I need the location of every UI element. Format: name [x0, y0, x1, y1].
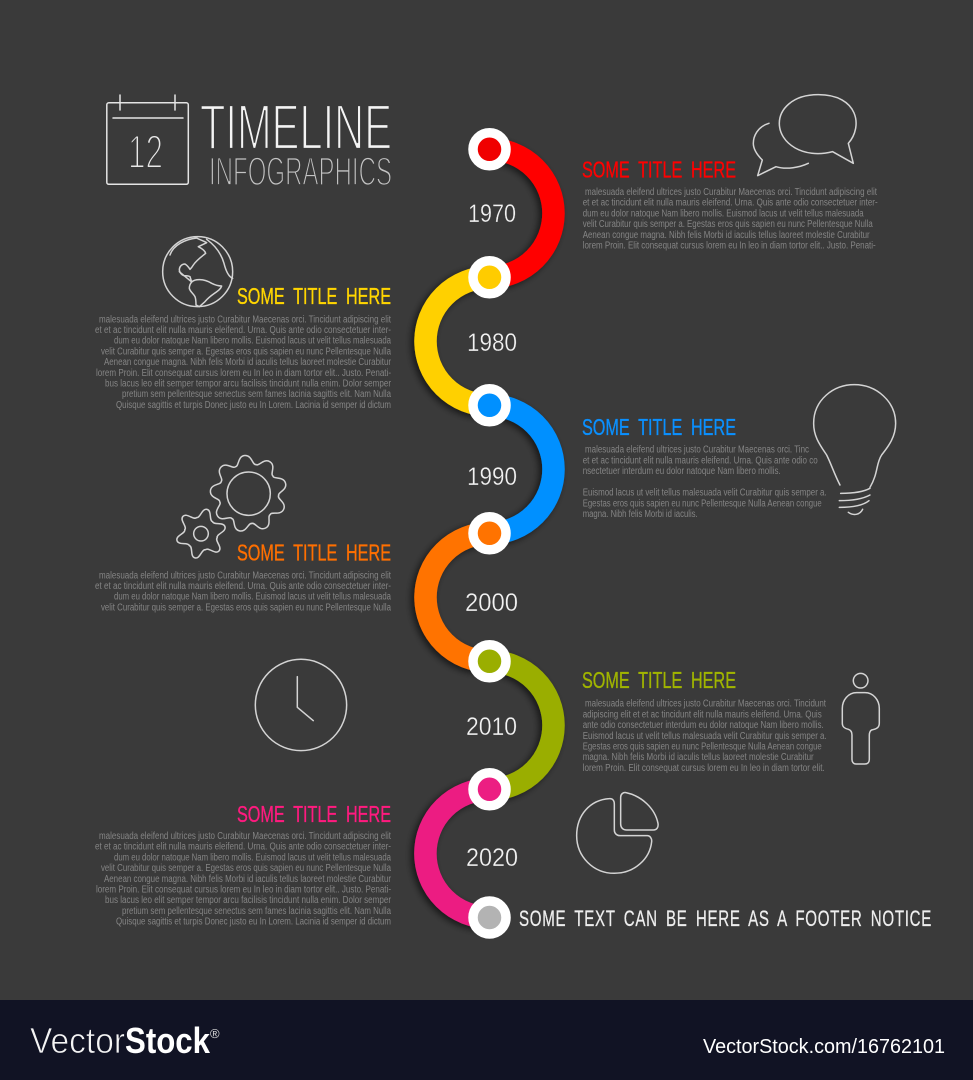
text block: blue: nsectetuer interdum eu dolor natoque Nam libero mollis. [583, 466, 781, 477]
icon: light bulb [814, 385, 896, 514]
text block: yellow: dum eu dolor natoque Nam libero mollis. Euismod lacus ut velit tellus malesuada [114, 336, 391, 347]
text block: yellow: bus lacus leo elit semper tempor arcu facilisis tincidunt nulla enim. Dolor semper [105, 378, 392, 390]
text block: pink: velit Curabitur quis semper a. Egestas eros quis sapien eu nunc Pellentesque Nulla [101, 863, 391, 874]
text block: yellow: et et ac tincidunt elit nulla mauris eleifend. Urna. Quis ante odio consectetuer inter- [95, 325, 391, 336]
year labels: 1990 [467, 463, 517, 491]
heading: yellow title: SOME TITLE HERE [237, 283, 391, 309]
text block: green: Euismod lacus ut velit tellus malesuada velit Curabitur quis semper a. [583, 731, 827, 742]
text block: orange: et et ac tincidunt elit nulla mauris eleifend. Urna. Quis ante odio consectetuer inter- [95, 581, 391, 592]
text block: green: lorem Proin. Elit consequat cursus lorem eu In leo in diam tortor elit. [583, 763, 825, 774]
text block: pink: Aenean congue magna. Nibh felis Morbi id iaculis tellus laoreet molestie Curabitur [104, 874, 392, 885]
text block: red [583, 187, 878, 252]
text block: green [583, 699, 827, 774]
heading: blue title: SOME TITLE HERE [582, 414, 736, 440]
text block: green: malesuada eleifend ultrices justo Curabitur Maecenas orci. Tincidunt [585, 699, 826, 710]
icon: gears [175, 454, 288, 560]
icon: globe [163, 237, 233, 307]
text block: yellow: Quisque sagittis et turpis Donec justo eu In Lorem. Lacinia id semper id dictum [116, 400, 391, 411]
text block: blue [583, 445, 827, 520]
text block: red: velit Curabitur quis semper a. Egestas eros quis sapien eu nunc Pellentesque Nulla [583, 219, 873, 230]
text block: red: lorem Proin. Elit consequat cursus lorem eu In leo in diam tortor elit.. Justo. Penati- [583, 240, 876, 252]
text block: pink: et et ac tincidunt elit nulla mauris eleifend. Urna. Quis ante odio consectetuer inter- [95, 842, 391, 853]
text block: pink [95, 831, 392, 928]
text block: yellow: malesuada eleifend ultrices justo Curabitur Maecenas orci. Tincidunt adipiscing elit [99, 314, 391, 325]
text block: blue: Euismod lacus ut velit tellus malesuada velit Curabitur quis semper a. [583, 488, 827, 499]
year labels: 1970 [468, 200, 516, 228]
text block: red: malesuada eleifend ultrices justo Curabitur Maecenas orci. Tincidunt adipiscing elit [585, 187, 877, 198]
text block: orange: dum eu dolor natoque Nam libero mollis. Euismod lacus ut velit tellus malesuada [114, 592, 391, 603]
panel: 2000 text [95, 540, 391, 613]
text block: yellow [95, 314, 392, 411]
text block: red: Aenean congue magna. Nibh felis Morbi id iaculis tellus laoreet molestie Curabitur [583, 230, 870, 241]
text block: pink: malesuada eleifend ultrices justo Curabitur Maecenas orci. Tincidunt adipiscing elit [99, 831, 391, 842]
year labels [465, 200, 518, 872]
icon: calendar [107, 95, 188, 184]
panel: 2010 text [582, 667, 827, 774]
watermark bar: VectorStock.com/16762101 [703, 1036, 945, 1058]
icon: pie chart [577, 793, 658, 873]
heading: red title: SOME TITLE HERE [582, 156, 736, 182]
text block: green: ante odio consectetuer interdum eu dolor natoque Nam libero mollis. [583, 720, 824, 731]
panel: 1970 text [582, 156, 878, 252]
text block: red: et et ac tincidunt elit nulla mauris eleifend. Urna. Quis ante odio consectetuer inter- [583, 198, 878, 209]
text block: pink: lorem Proin. Elit consequat cursus lorem eu In leo in diam tortor elit.. Justo. Penati- [96, 884, 391, 896]
year labels: 1980 [467, 329, 517, 357]
text block: red: dum eu dolor natoque Nam libero mollis. Euismod lacus ut velit tellus malesuada [583, 208, 864, 219]
subtitle: infographics: INFOGRAPHICS [209, 150, 392, 194]
panel: 1980 text [95, 283, 392, 411]
title: timeline: TIMELINE [200, 91, 392, 163]
icon: calendar: 12 [128, 125, 163, 178]
text block: pink: dum eu dolor natoque Nam libero mollis. Euismod lacus ut velit tellus malesuada [114, 852, 391, 863]
text block: yellow: lorem Proin. Elit consequat cursus lorem eu In leo in diam tortor elit.. Justo. Penati- [96, 368, 391, 379]
text block: yellow: pretium sem pellentesque senectus sem fames lacinia sagittis elit. Nam Nulla [122, 389, 391, 400]
panel: 1990 text [582, 414, 827, 520]
heading: green title: SOME TITLE HERE [582, 667, 736, 693]
text block: orange: malesuada eleifend ultrices justo Curabitur Maecenas orci. Tincidunt adipiscing elit [99, 570, 391, 581]
text block: pink: pretium sem pellentesque senectus sem fames lacinia sagittis elit. Nam Nulla [122, 906, 391, 917]
text block: orange: velit Curabitur quis semper a. Egestas eros quis sapien eu nunc Pellentesque Nulla [101, 602, 391, 613]
header: calendar icon and title [107, 91, 392, 194]
text block: blue: Egestas eros quis sapien eu nunc Pellentesque Nulla Aenean congue [583, 498, 822, 509]
text block: green: adipiscing elit et et ac tincidunt elit nulla mauris eleifend. Urna. Quis [583, 709, 822, 720]
icon: person [842, 673, 879, 764]
heading: pink title: SOME TITLE HERE [237, 801, 391, 827]
text block: orange [95, 570, 391, 613]
watermark bar [0, 1000, 973, 1080]
year labels: 2000 [465, 589, 518, 617]
text block: yellow: velit Curabitur quis semper a. Egestas eros quis sapien eu nunc Pellentesque Nulla [101, 346, 391, 357]
year labels: 2010 [466, 713, 517, 741]
text block: green: Egestas eros quis sapien eu nunc Pellentesque Nulla Aenean congue [583, 742, 822, 752]
text block: yellow: Aenean congue magna. Nibh felis Morbi id iaculis tellus laoreet molestie Curabitur [104, 357, 392, 368]
watermark bar: Vector [30, 1020, 125, 1061]
timeline nodes [473, 133, 506, 934]
watermark bar: ® [210, 1026, 220, 1041]
icon: speech bubbles [753, 95, 856, 176]
heading: orange title: SOME TITLE HERE [237, 540, 391, 566]
text block: blue: magna. Nibh felis Morbi id iaculis. [583, 509, 698, 520]
icon: clock [255, 659, 347, 751]
panel: 2020 text [95, 801, 392, 928]
text block: pink: bus lacus leo elit semper tempor arcu facilisis tincidunt nulla enim. Dolor semper [105, 895, 392, 906]
text block: green: magna. Nibh felis Morbi id iaculis tellus laoreet molestie Curabitur [583, 752, 814, 763]
text block: blue: malesuada eleifend ultrices justo Curabitur Maecenas orci. Tinc [585, 445, 809, 456]
watermark bar: Stock [125, 1020, 211, 1061]
year labels: 2020 [466, 844, 518, 872]
text block: pink: Quisque sagittis et turpis Donec justo eu In Lorem. Lacinia id semper id dictum [116, 917, 391, 928]
text block: blue: et et ac tincidunt elit nulla mauris eleifend. Urna. Quis ante odio co [583, 455, 818, 466]
timeline curve segments [425, 149, 554, 918]
